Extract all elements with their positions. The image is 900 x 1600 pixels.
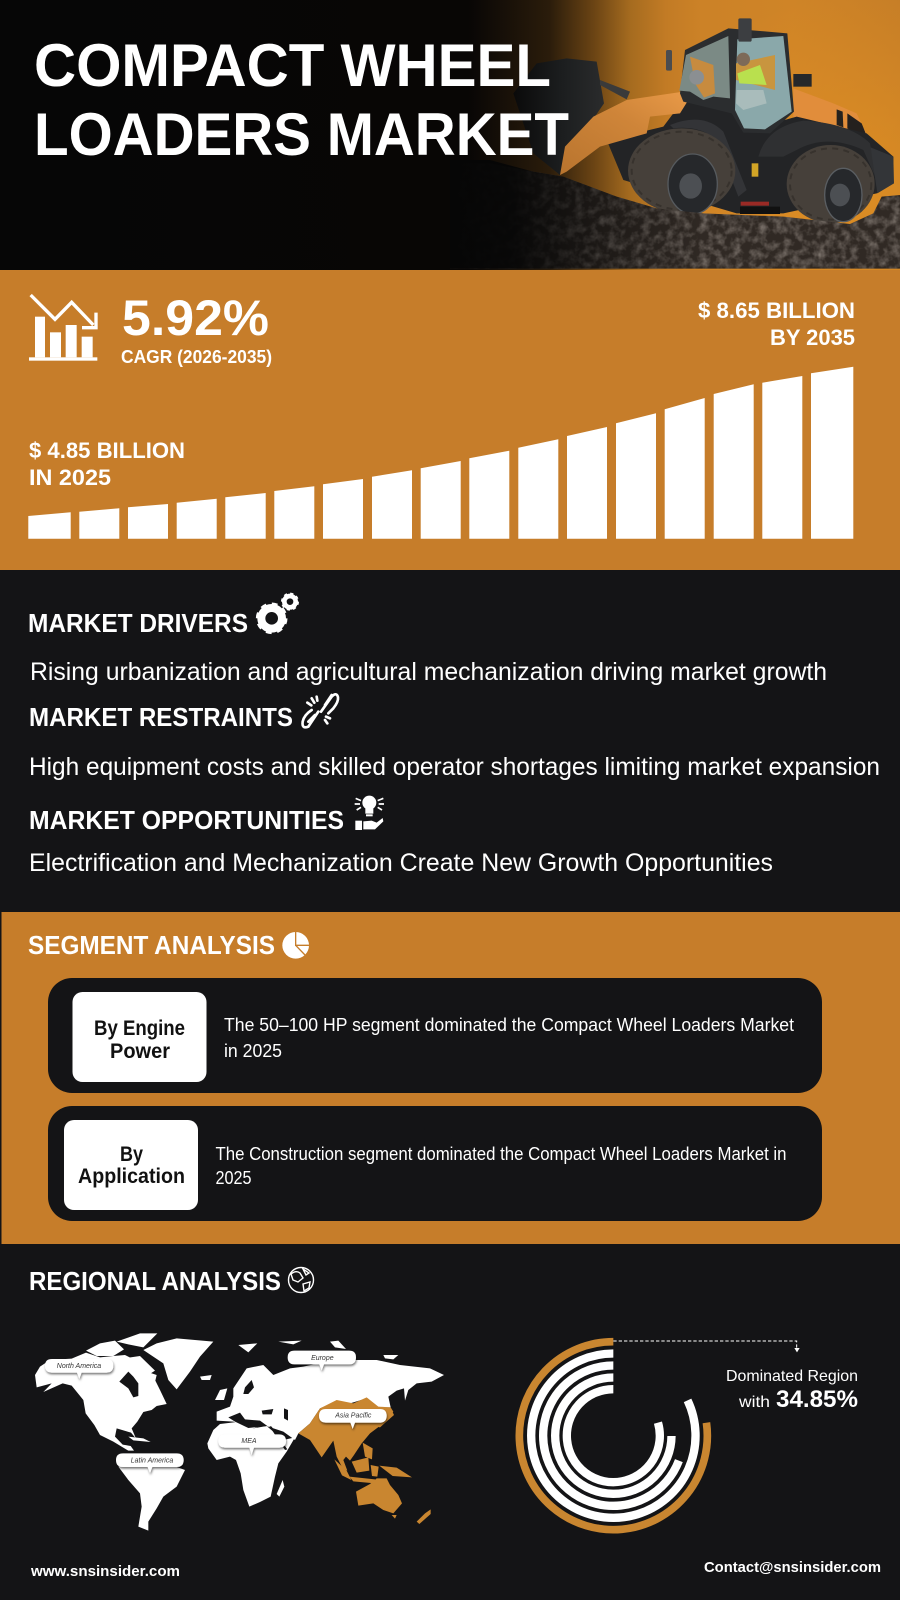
south america <box>118 1457 185 1531</box>
CAGR label: CAGR (2026-2035) <box>121 347 272 367</box>
icon: broken chain <box>303 694 338 727</box>
panel: drivers, restraints, opportunities <box>28 594 880 877</box>
text: application finding <box>216 1144 786 1188</box>
dashed connector arrow <box>613 1341 800 1352</box>
title: COMPACT WHEEL <box>34 32 551 99</box>
start value label <box>29 438 185 490</box>
callout: latin america <box>116 1453 184 1473</box>
end value label: $ 8.65 BILLION <box>698 298 855 323</box>
callout: north america: North America <box>57 1363 101 1370</box>
start value label: $ 4.85 BILLION <box>29 438 185 463</box>
label: by application <box>64 1120 198 1210</box>
callout: latin america: Latin America <box>131 1458 173 1465</box>
inland seas <box>228 1380 288 1450</box>
text: restraints: High equipment costs and skilled operator shortages limiting market expansion <box>29 753 880 781</box>
callout: mea: MEA <box>241 1438 257 1445</box>
soil <box>450 163 900 269</box>
callout: europe <box>288 1351 356 1371</box>
segment background <box>2 912 900 1244</box>
world map <box>35 1333 444 1531</box>
radial bar chart <box>519 1342 707 1530</box>
CAGR value: 5.92% <box>122 290 269 346</box>
label: by engine power: Power <box>110 1040 170 1063</box>
title: LOADERS MARKET <box>34 101 569 168</box>
text: dominated region: with <box>738 1394 770 1411</box>
footer: website: www.snsinsider.com <box>30 1563 180 1580</box>
card: by application <box>48 1106 822 1221</box>
band background <box>0 270 900 570</box>
heading: segment analysis: SEGMENT ANALYSIS <box>28 930 275 960</box>
heading: market drivers: MARKET DRIVERS <box>28 608 248 638</box>
text: engine power finding <box>224 1015 794 1061</box>
heading: market opportunities: MARKET OPPORTUNITIES <box>29 805 344 835</box>
panel: segment analysis <box>2 912 900 1244</box>
heading: market restraints: MARKET RESTRAINTS <box>29 702 293 732</box>
callout: europe: Europe <box>311 1355 334 1362</box>
icon: pie chart <box>282 932 309 959</box>
text: dominated region <box>726 1368 858 1413</box>
photo: compact wheel loader on soil <box>450 18 900 269</box>
title <box>34 32 569 168</box>
panel: header <box>0 0 900 270</box>
card: by engine power <box>48 978 822 1093</box>
eurasia west and africa <box>207 1360 444 1507</box>
text: engine power finding: The 50–100 HP segment dominated the Compact Wheel Loaders Market <box>224 1015 794 1035</box>
callout: north america <box>45 1359 113 1379</box>
label: by application: Application <box>78 1165 185 1188</box>
text: application finding: The Construction segment dominated the Compact Wheel Loaders Market in <box>216 1144 786 1164</box>
label: by engine power: By Engine <box>94 1017 185 1040</box>
start value label: IN 2025 <box>29 465 111 490</box>
text: application finding: 2025 <box>216 1168 252 1188</box>
heading: regional analysis: REGIONAL ANALYSIS <box>29 1266 281 1296</box>
north america and greenland <box>35 1333 398 1451</box>
text: engine power finding: in 2025 <box>224 1041 282 1061</box>
text: drivers: Rising urbanization and agricultural mechanization driving market growth <box>30 658 827 686</box>
hudson bay <box>119 1372 138 1397</box>
icon: gears <box>257 594 298 633</box>
end value label <box>698 298 855 350</box>
icon: bulb in hand <box>355 796 384 830</box>
end value label: BY 2035 <box>770 325 855 350</box>
callout: asia pacific: Asia Pacific <box>334 1413 372 1420</box>
bar chart: market growth <box>28 367 853 539</box>
panel: market size band <box>0 270 900 570</box>
panel: regional analysis <box>29 1266 858 1531</box>
footer: contact: Contact@snsinsider.com <box>704 1559 881 1576</box>
label: by engine power <box>72 992 206 1082</box>
callout: mea <box>218 1434 286 1455</box>
text: dominated region: 34.85% <box>776 1386 858 1413</box>
icon: declining chart <box>29 295 97 361</box>
header background <box>0 0 900 270</box>
label: by application: By <box>120 1143 143 1166</box>
callout: asia pacific <box>319 1409 387 1429</box>
text: dominated region: Dominated Region <box>726 1368 858 1385</box>
text: opportunities: Electrification and Mechanization Create New Growth Opportunities <box>29 849 773 877</box>
asia pacific highlighted <box>298 1397 431 1524</box>
icon: globe <box>288 1268 314 1292</box>
